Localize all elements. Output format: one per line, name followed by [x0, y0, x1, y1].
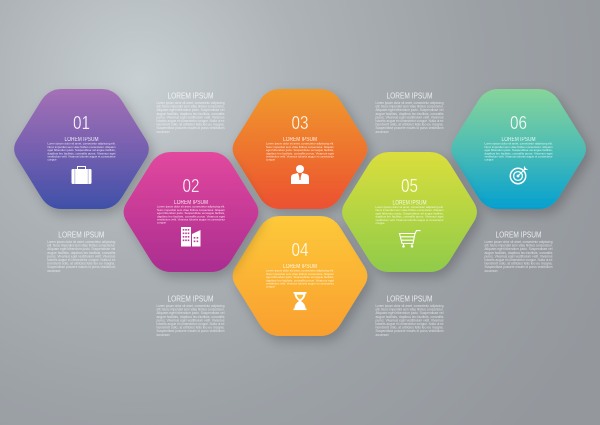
body text [266, 142, 334, 162]
body text: dapibus leo facilisis, convallis purus. Vivamus eget [266, 151, 334, 155]
text block: top left [156, 91, 225, 134]
body text: augue facilisis, dapibus leo facilisis, convallis [376, 315, 444, 319]
body text [47, 240, 116, 273]
icon: target [510, 166, 528, 184]
body text: congue [157, 221, 166, 225]
body text: Lorem ipsum dolor sit amet, consectetur adipiscing elit. [376, 205, 444, 209]
body text: purus. Vivamus eget vestibulum velit. Vivamus [376, 115, 444, 119]
body text: Lorem ipsum dolor sit amet, consectetur adipiscing [376, 101, 444, 105]
text block: top right [376, 91, 444, 134]
body text: dapibus leo facilisis, convallis purus. Vivamus eget [48, 151, 116, 155]
number 03: 03 [292, 112, 308, 133]
body text [376, 205, 444, 225]
body text [156, 101, 225, 134]
heading: LOREM IPSUM [392, 200, 426, 206]
body text: Lorem ipsum dolor sit amet, consectetur adipiscing [156, 304, 225, 308]
text block: under hexagon 06 [484, 230, 553, 273]
body text: hendrerit odio, at ultricies felis leo eu magna. [484, 262, 553, 266]
hexagon 06 shape [451, 89, 586, 209]
icon: office buildings [181, 227, 200, 246]
body text [266, 269, 334, 289]
body text: vestibulum velit. Vivamus lobortis augue et consectetur [376, 218, 444, 222]
heading: LOREM IPSUM [168, 294, 214, 303]
body text [484, 240, 553, 273]
body text [376, 101, 444, 134]
body text: Suspendisse posuere mauris id purus vestibulum [156, 126, 225, 130]
body text: hendrerit odio, at ultricies felis leo eu magna. [376, 123, 444, 127]
body text: eget bibendum justo. Suspendisse vel augue facilisis, [376, 211, 444, 215]
body text: augue facilisis, dapibus leo facilisis, convallis [156, 112, 225, 116]
heading: LOREM IPSUM [386, 294, 433, 303]
body text: lobortis augue et consectetur congue. Nulla ut ex [156, 322, 225, 326]
body text: eget bibendum justo. Suspendisse vel augue facilisis, [266, 275, 334, 279]
body text [157, 205, 225, 225]
panel: hexagon 06 [451, 89, 586, 209]
number 04: 04 [292, 239, 308, 260]
body text: Nunc imperdiet sem vitae finibus consectetur. Aliquam [266, 145, 334, 149]
body text: Lorem ipsum dolor sit amet, consectetur adipiscing [47, 240, 115, 244]
body text: Aliquam eget bibendum justo. Suspendisse vel [47, 247, 116, 251]
body text: Nunc imperdiet sem vitae finibus consectetur. Aliquam [266, 272, 334, 276]
body text: vestibulum velit. Vivamus lobortis augue et consectetur [484, 154, 552, 158]
body text: augue facilisis, dapibus leo facilisis, convallis [484, 251, 553, 255]
number 02: 02 [182, 175, 200, 196]
body text: Aliquam eget bibendum justo. Suspendisse vel [376, 311, 444, 315]
body text: elit. Nunc imperdiet sem vitae finibus consectetur. [156, 308, 225, 312]
body text: augue facilisis, dapibus leo facilisis, convallis [47, 251, 116, 255]
body text: eget bibendum justo. Suspendisse vel augue facilisis, [48, 148, 116, 152]
body text: Nunc imperdiet sem vitae finibus consectetur. Aliquam [157, 208, 225, 212]
body text: Nunc imperdiet sem vitae finibus consectetur. Aliquam [48, 145, 116, 149]
body text: augue facilisis, dapibus leo facilisis, convallis [376, 112, 444, 116]
body text: accumsan [376, 130, 389, 134]
body text: vestibulum velit. Vivamus lobortis augue et consectetur [266, 154, 334, 158]
number 01: 01 [73, 112, 90, 133]
hexagon 05 shape [342, 152, 477, 272]
body text: augue facilisis, dapibus leo facilisis, convallis [156, 315, 225, 319]
body text: Aliquam eget bibendum justo. Suspendisse vel [376, 108, 444, 112]
body text: Lorem ipsum dolor sit amet, consectetur adipiscing elit. [484, 142, 553, 146]
panel: hexagon 05 [342, 152, 477, 272]
body text: accumsan [376, 333, 389, 337]
body text: elit. Nunc imperdiet sem vitae finibus consectetur. [484, 244, 553, 248]
heading: LOREM IPSUM [496, 230, 542, 239]
body text: Lorem ipsum dolor sit amet, consectetur adipiscing elit. [266, 269, 334, 273]
hexagon 01 shape [14, 89, 149, 209]
body text: Aliquam eget bibendum justo. Suspendisse vel [484, 247, 553, 251]
icon: shopping cart [400, 231, 420, 247]
body text: accumsan [47, 269, 60, 273]
body text: purus. Vivamus eget vestibulum velit. Vivamus [156, 115, 225, 119]
body text: Lorem ipsum dolor sit amet, consectetur adipiscing [484, 240, 553, 244]
body text: lobortis augue et consectetur congue. Nulla ut ex [376, 119, 444, 123]
heading: LOREM IPSUM [283, 137, 317, 143]
body text: congue [484, 158, 494, 162]
body text: congue [266, 285, 275, 289]
body text: lobortis augue et consectetur congue. Nulla ut ex [484, 258, 553, 262]
body text: Suspendisse posuere mauris id purus vestibulum [376, 126, 444, 130]
text block: under hexagon 01 [47, 230, 116, 273]
body text: Aliquam eget bibendum justo. Suspendisse vel [156, 108, 225, 112]
body text [376, 304, 444, 337]
body text: purus. Vivamus eget vestibulum velit. Vivamus [484, 254, 553, 258]
body text: Lorem ipsum dolor sit amet, consectetur adipiscing [376, 304, 444, 308]
body text: Nunc imperdiet sem vitae finibus consectetur. Aliquam [484, 145, 553, 149]
body text: Lorem ipsum dolor sit amet, consectetur adipiscing elit. [266, 142, 334, 146]
body text: hendrerit odio, at ultricies felis leo eu magna. [376, 326, 444, 330]
text block: under hexagon 02 [156, 294, 225, 337]
body text: Suspendisse posuere mauris id purus vestibulum [484, 265, 553, 269]
hexagon 04 shape [233, 216, 367, 336]
body text: eget bibendum justo. Suspendisse vel augue facilisis, [484, 148, 553, 152]
panel: hexagon 01 [14, 89, 149, 209]
body text: elit. Nunc imperdiet sem vitae finibus consectetur. [376, 308, 444, 312]
body text: accumsan [156, 130, 170, 134]
body text: Suspendisse posuere mauris id purus vestibulum [47, 265, 116, 269]
heading: LOREM IPSUM [58, 230, 105, 239]
heading: LOREM IPSUM [174, 200, 208, 206]
body text: dapibus leo facilisis, convallis purus. Vivamus eget [266, 278, 334, 282]
body text: dapibus leo facilisis, convallis purus. Vivamus eget [157, 214, 225, 218]
body text [156, 304, 225, 337]
body text: vestibulum velit. Vivamus lobortis augue et consectetur [48, 154, 116, 158]
heading: LOREM IPSUM [168, 91, 214, 100]
body text [48, 142, 116, 162]
body text: vestibulum velit. Vivamus lobortis augue et consectetur [157, 218, 225, 222]
body text: elit. Nunc imperdiet sem vitae finibus consectetur. [156, 105, 225, 109]
body text: hendrerit odio, at ultricies felis leo eu magna. [156, 326, 225, 330]
hexagon 02 shape [124, 152, 258, 272]
body text: hendrerit odio, at ultricies felis leo eu magna. [47, 262, 115, 266]
body text: Suspendisse posuere mauris id purus vestibulum [156, 329, 225, 333]
body text: purus. Vivamus eget vestibulum velit. Vivamus [47, 254, 116, 258]
body text: lobortis augue et consectetur congue. Nulla ut ex [47, 258, 116, 262]
body text [484, 142, 553, 162]
text block: under hexagon 05 [376, 294, 444, 337]
number 05: 05 [401, 175, 418, 196]
body text: eget bibendum justo. Suspendisse vel augue facilisis, [157, 211, 225, 215]
heading: LOREM IPSUM [283, 264, 317, 270]
body text: vestibulum velit. Vivamus lobortis augue et consectetur [266, 282, 334, 286]
body text: Aliquam eget bibendum justo. Suspendisse vel [156, 311, 225, 315]
body text: dapibus leo facilisis, convallis purus. Vivamus eget [484, 151, 553, 155]
icon: businessman [291, 165, 309, 184]
panel: hexagon 03 [233, 89, 367, 209]
body text: purus. Vivamus eget vestibulum velit. Vivamus [156, 318, 225, 322]
panel: hexagon 04 [233, 216, 367, 336]
body text: congue [266, 158, 275, 162]
body text: purus. Vivamus eget vestibulum velit. Vivamus [376, 318, 444, 322]
body text: elit. Nunc imperdiet sem vitae finibus consectetur. [47, 244, 115, 248]
heading: LOREM IPSUM [502, 137, 536, 143]
number 06: 06 [510, 112, 527, 133]
body text: congue [48, 158, 57, 162]
body text: hendrerit odio, at ultricies felis leo eu magna. [156, 123, 225, 127]
body text: lobortis augue et consectetur congue. Nulla ut ex [376, 322, 444, 326]
body text: Lorem ipsum dolor sit amet, consectetur adipiscing elit. [157, 205, 225, 209]
icon: briefcase [72, 166, 92, 184]
icon: hourglass [294, 292, 306, 310]
body text: Lorem ipsum dolor sit amet, consectetur adipiscing [156, 101, 225, 105]
body text: Nunc imperdiet sem vitae finibus consectetur. Aliquam [376, 208, 444, 212]
heading: LOREM IPSUM [64, 137, 98, 143]
body text: Lorem ipsum dolor sit amet, consectetur adipiscing elit. [48, 142, 116, 146]
body text: elit. Nunc imperdiet sem vitae finibus consectetur. [376, 105, 444, 109]
hexagon 03 shape [233, 89, 367, 209]
panel: hexagon 02 [124, 152, 258, 272]
body text: accumsan [156, 333, 170, 337]
body text: accumsan [484, 269, 498, 273]
heading: LOREM IPSUM [386, 91, 433, 100]
body text: eget bibendum justo. Suspendisse vel augue facilisis, [266, 148, 334, 152]
body text: Suspendisse posuere mauris id purus vestibulum [376, 329, 444, 333]
body text: lobortis augue et consectetur congue. Nulla ut ex [156, 119, 225, 123]
body text: dapibus leo facilisis, convallis purus. Vivamus eget [376, 215, 444, 219]
body text: congue [376, 221, 385, 225]
